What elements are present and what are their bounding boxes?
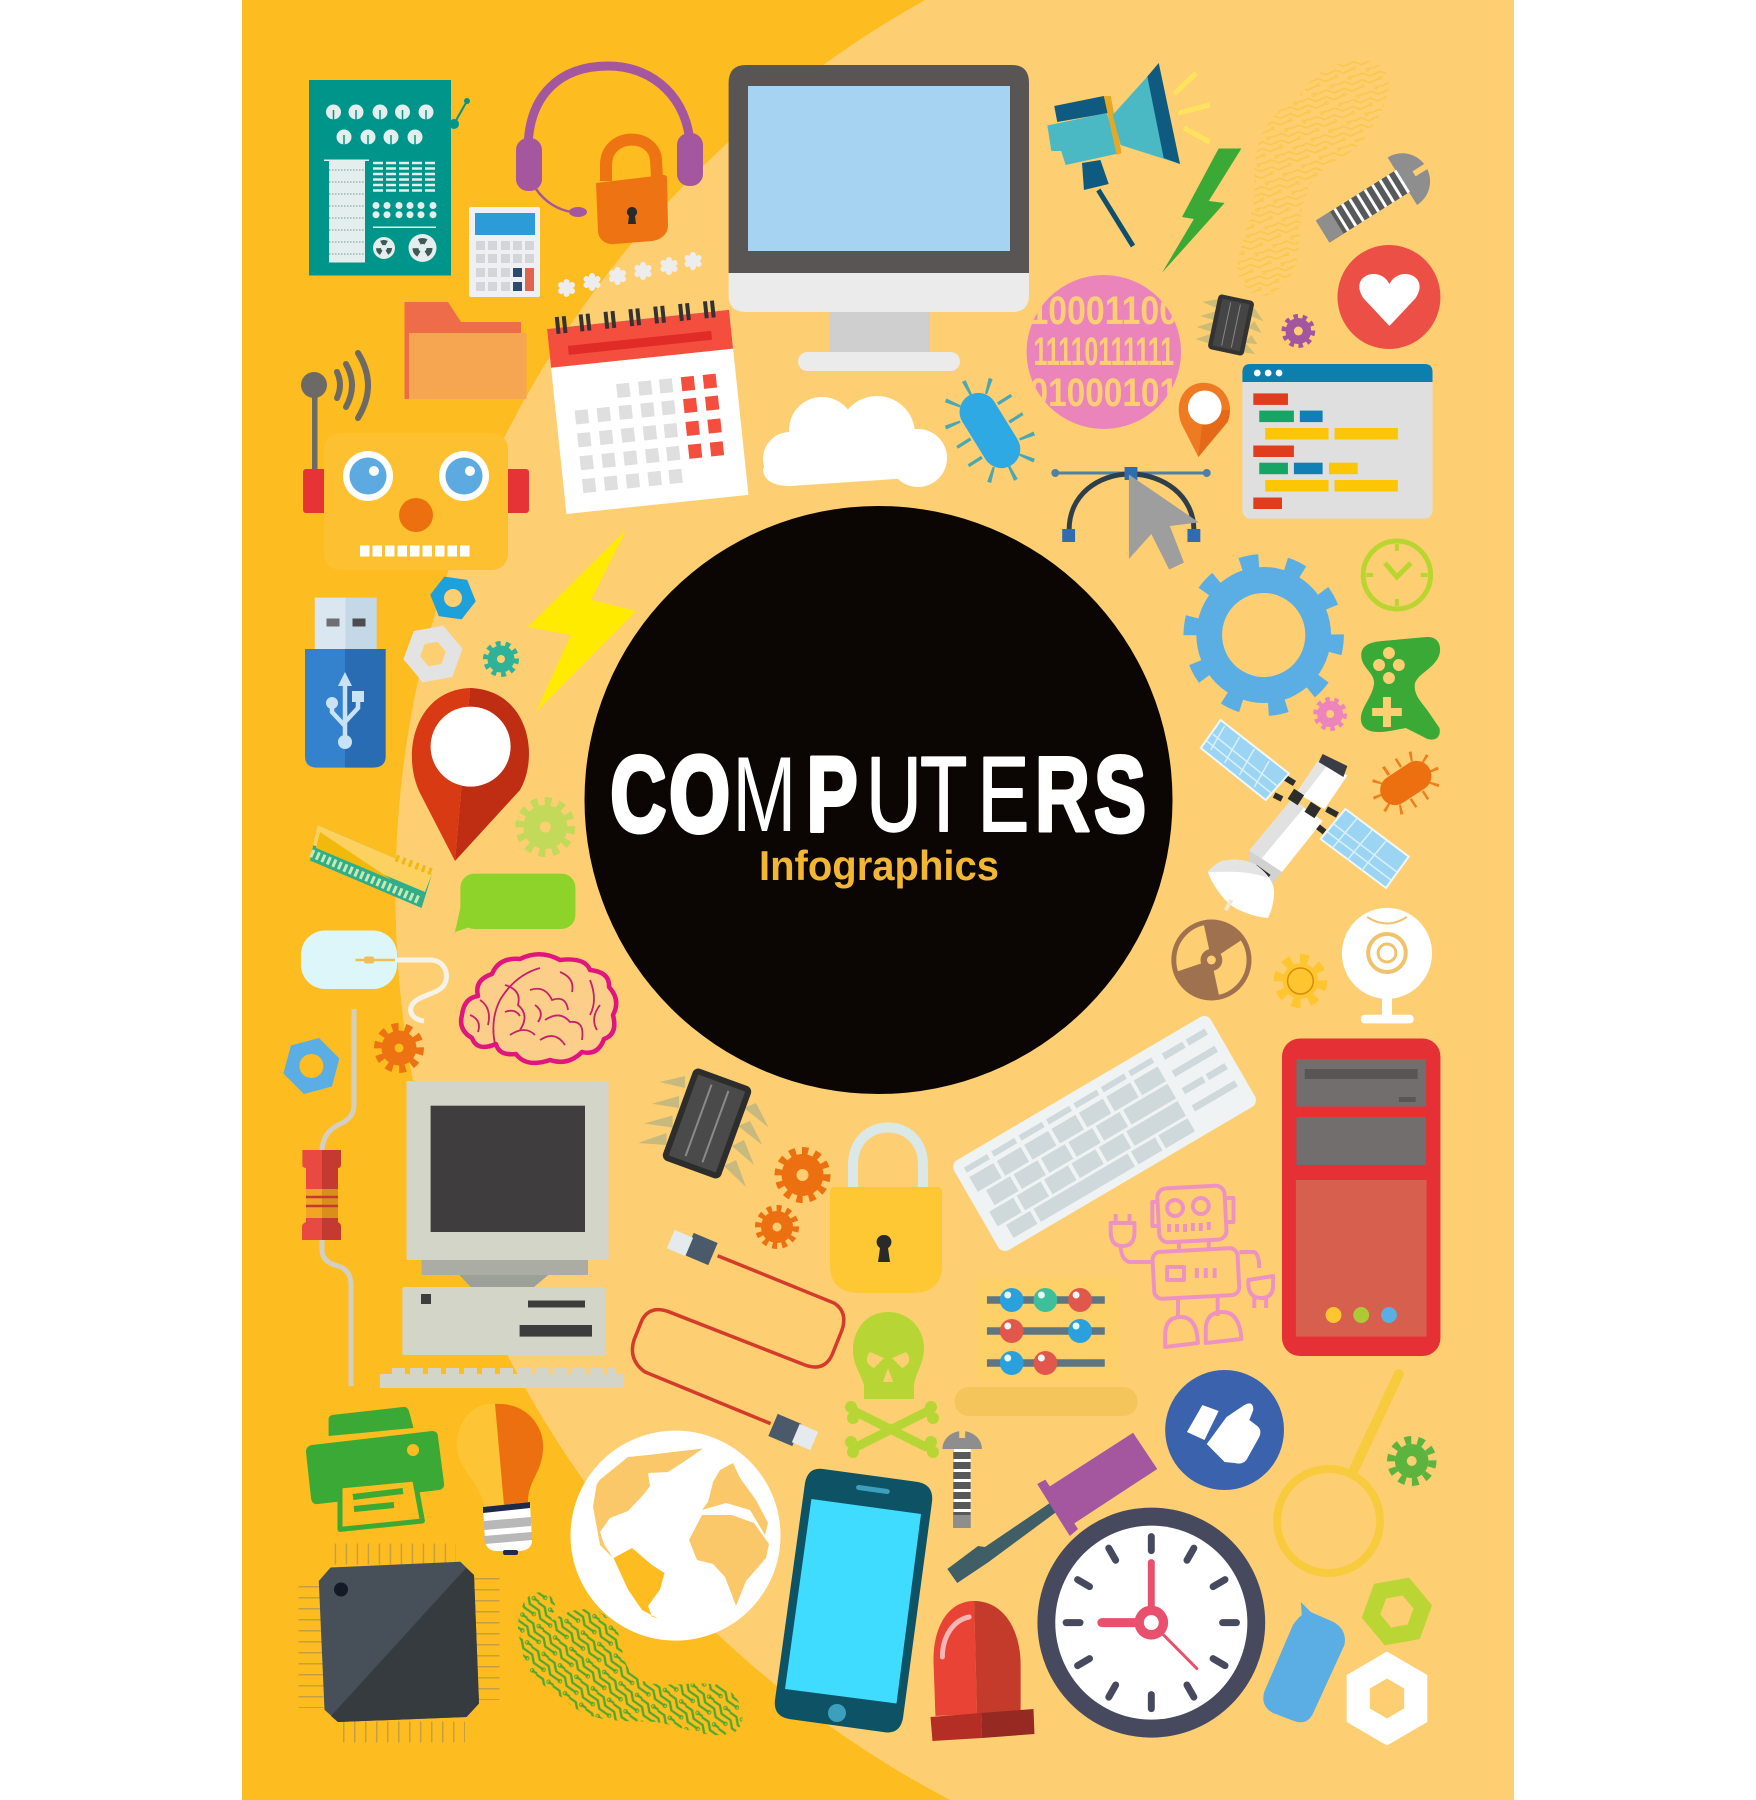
- icon: usb drive: [305, 598, 386, 768]
- icon: red map pin: [412, 688, 529, 861]
- icon: lime skull and crossbones: [845, 1312, 939, 1458]
- icon: light bulb: [457, 1404, 543, 1555]
- icon: grey hex nut: [399, 623, 467, 685]
- icon: purple gear: [1284, 316, 1313, 346]
- icon: grey screw: [1308, 143, 1441, 255]
- title: T: [920, 735, 967, 854]
- icon: red computer tower: [1282, 1038, 1440, 1356]
- icon: lime hex nut: [1356, 1575, 1437, 1648]
- title: E: [978, 735, 1029, 854]
- icon: computer mouse: [301, 930, 446, 1021]
- central black circle: [584, 506, 1172, 1094]
- icon: blue bacterium: [940, 374, 1039, 487]
- right column icons group: [940, 60, 1443, 1356]
- icon: game controller: [1361, 637, 1440, 740]
- icon: heart badge: [1337, 245, 1440, 349]
- icon: green circuit footprint: [518, 1592, 743, 1735]
- icon: red alarm light: [930, 1601, 1034, 1741]
- icon: small microchip: [1195, 294, 1264, 356]
- icon: blue hex nut left: [277, 1034, 346, 1098]
- icon: brain: [461, 954, 616, 1063]
- icon: teal gear: [486, 644, 516, 674]
- icon: large processor chip: [311, 1554, 487, 1732]
- icon: green speech bubble: [455, 874, 575, 932]
- icon: yellow sun gear: [1279, 959, 1322, 1003]
- icon: green printer: [306, 1407, 444, 1529]
- icon: retro computer: [380, 1081, 623, 1388]
- cover background: [242, 0, 1514, 1800]
- icon: bezier pen cursor: [1051, 467, 1211, 570]
- icon: screwdriver: [947, 1433, 1157, 1583]
- icon: lime wall clock outline: [1363, 541, 1431, 609]
- title: M: [732, 735, 796, 854]
- icon: resistor with wire: [302, 1009, 354, 1386]
- icon: magnifying glass: [1277, 1374, 1399, 1573]
- icon: wall clock: [1037, 1508, 1265, 1738]
- icon: computer keyboard: [950, 1013, 1259, 1254]
- icon: binary code circle: 11110111111: [1033, 330, 1174, 374]
- icon: large blue gear: [1191, 562, 1336, 708]
- title: U: [866, 735, 922, 854]
- icon: code editor window: [1242, 364, 1433, 519]
- icon: binary code circle: 01000101: [1030, 371, 1178, 415]
- icon: orange bacterium: [1369, 749, 1443, 817]
- title: R: [1035, 735, 1090, 854]
- icon: light green gear: [520, 802, 570, 852]
- icon: pink gear: [1316, 700, 1344, 728]
- icon: folder: [404, 302, 526, 399]
- icon: yellow lightning bolt: [528, 530, 636, 712]
- subtitle: Infographics: [759, 842, 999, 889]
- icon: faint circuit footprint: [1237, 60, 1389, 296]
- icon: calculator: [469, 207, 540, 297]
- icon: headset: [516, 66, 703, 217]
- icon: password asterisks: [561, 255, 698, 294]
- title: O: [670, 735, 730, 854]
- icon: brown disc: [1174, 922, 1249, 998]
- icon: globe: [570, 1431, 780, 1641]
- icon: green lightning bolt: [1162, 148, 1241, 272]
- icon: binary code circle: [1027, 275, 1181, 429]
- icon: white hex nut: [1327, 1640, 1447, 1757]
- title: [611, 735, 1146, 854]
- icon: dark chip tilted: [638, 1067, 769, 1187]
- right bottom icons group: [1263, 1575, 1447, 1757]
- icon: cloud: [763, 396, 947, 487]
- icon: teal punch panel: [309, 80, 470, 276]
- icon: robot head with antenna: [301, 353, 529, 570]
- title: S: [1094, 735, 1146, 854]
- icon: red usb cable: [632, 1230, 844, 1450]
- title: P: [806, 735, 858, 854]
- icon: blue speech bubble: [1263, 1602, 1345, 1722]
- icon: wall calendar: [546, 299, 748, 514]
- icon: pink outlined robot: [1111, 1185, 1273, 1347]
- icon: smartphone: [775, 1469, 932, 1732]
- icon: orange gears pair: [758, 1151, 826, 1246]
- icon: megaphone: [1047, 63, 1210, 246]
- icon: memory stick: [310, 825, 432, 908]
- icon: blue hex nut: [427, 575, 479, 621]
- icon: orange gear: [378, 1027, 420, 1069]
- lower right icons group: [930, 1185, 1433, 1741]
- icon: yellow padlock: [830, 1128, 942, 1293]
- icon: desktop monitor: [729, 65, 1029, 371]
- icon: thumbs up badge: [1165, 1370, 1284, 1490]
- icon: satellite: [1201, 720, 1409, 918]
- icon: orange padlock: [596, 140, 668, 244]
- icon: green gear right: [1391, 1440, 1433, 1482]
- icon: abacus: [955, 1278, 1137, 1416]
- icon: binary code circle: 10001100: [1030, 289, 1178, 333]
- title: C: [611, 735, 666, 854]
- icon: orange map pin: [1179, 383, 1230, 457]
- icon: webcam: [1342, 908, 1432, 1023]
- icon: vertical screw: [942, 1431, 982, 1528]
